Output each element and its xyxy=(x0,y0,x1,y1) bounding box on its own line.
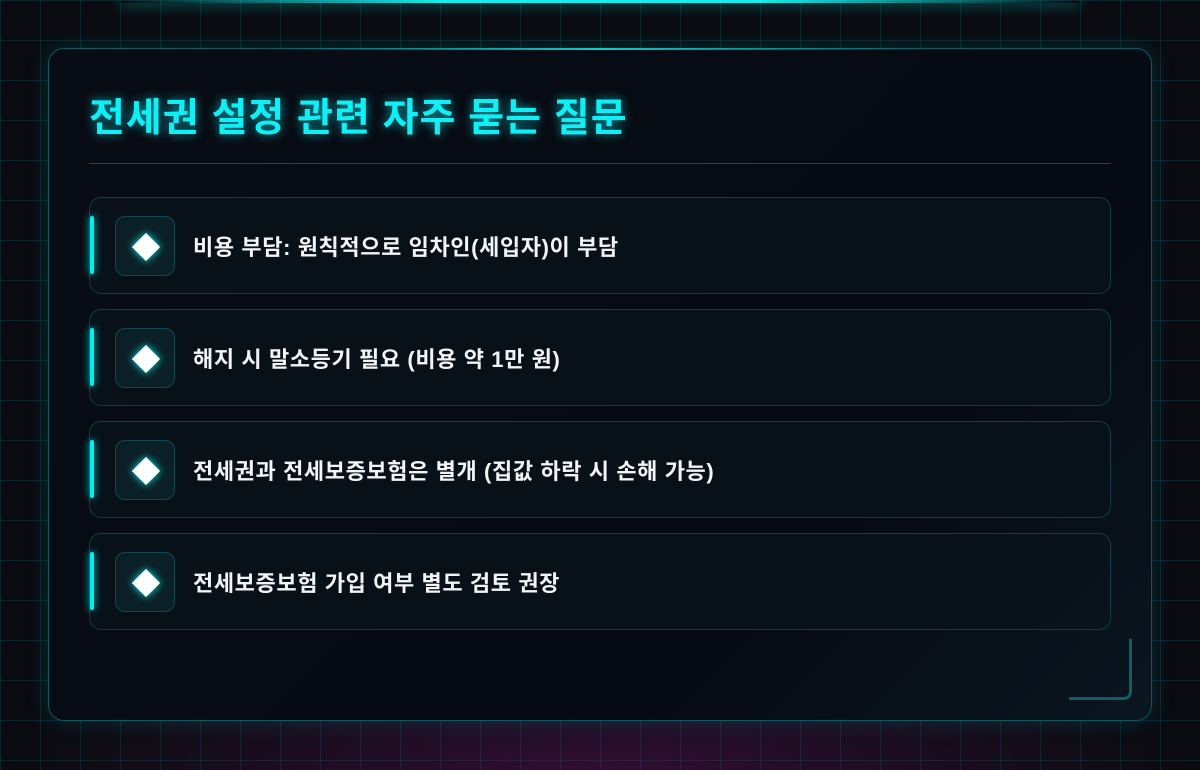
icon: diamond xyxy=(115,552,175,612)
corner bracket xyxy=(1069,639,1132,700)
text 1: 비용 부담: 원칙적으로 임차인(세입자)이 부담 xyxy=(193,235,619,260)
icon: diamond xyxy=(115,440,175,500)
text 4: 전세보증보험 가입 여부 별도 검토 권장 xyxy=(193,571,560,596)
text 2: 해지 시 말소등기 필요 (비용 약 1만 원) xyxy=(193,347,560,372)
item 1 xyxy=(89,197,1111,294)
item 2 xyxy=(89,309,1111,406)
text 3: 전세권과 전세보증보험은 별개 (집값 하락 시 손해 가능) xyxy=(193,459,714,484)
title: 전세권 설정 관련 자주 묻는 질문 xyxy=(89,97,628,140)
icon: diamond xyxy=(115,328,175,388)
icon: diamond xyxy=(115,216,175,276)
item 3 xyxy=(89,421,1111,518)
item 4 xyxy=(89,533,1111,630)
